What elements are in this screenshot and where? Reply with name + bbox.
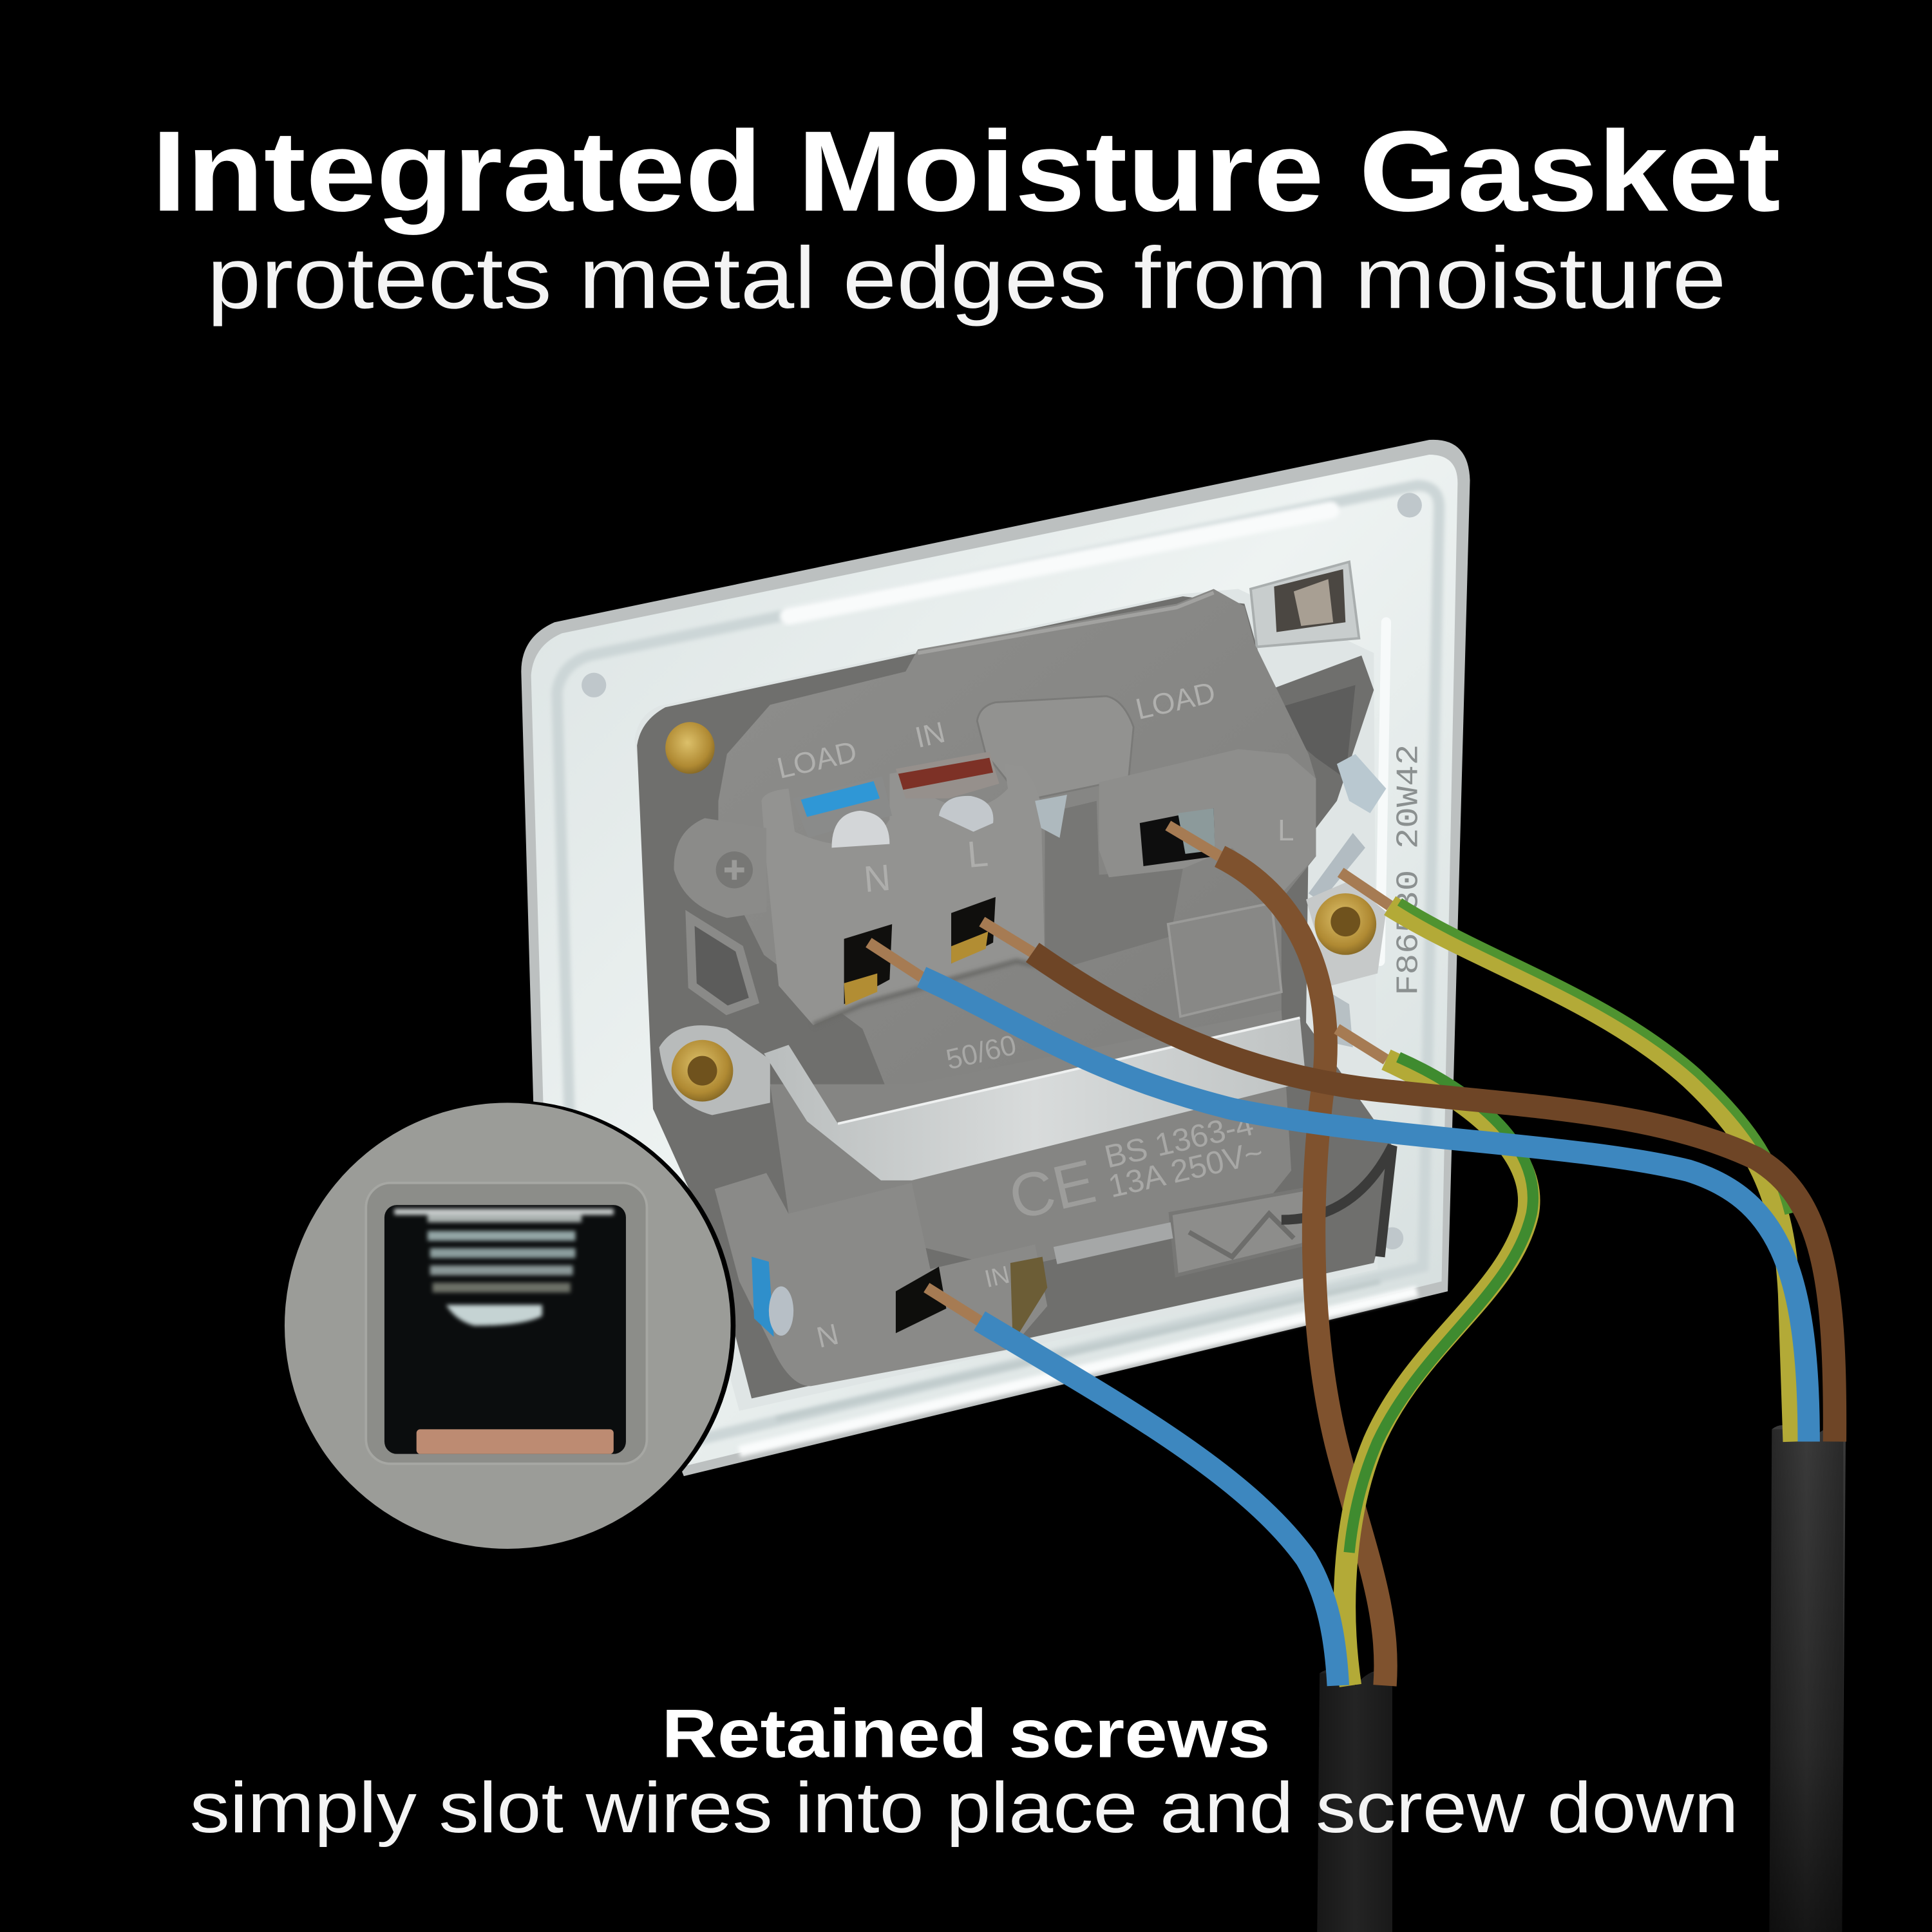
right cable sheath <box>1769 1425 1846 1932</box>
side screw <box>769 1286 793 1336</box>
brass fixing screw <box>665 722 715 774</box>
wires <box>869 826 1835 1685</box>
blanking tab <box>977 696 1133 801</box>
metal backplate <box>634 589 1378 1411</box>
rating markings <box>943 1029 1267 1233</box>
neutral wire hole <box>844 924 892 1005</box>
caption text: simply slot wires into place and screw down <box>190 1768 1739 1848</box>
N mark: N <box>813 1317 842 1354</box>
moulded labels: LOAD <box>774 734 860 785</box>
lower back frame edge <box>1282 1146 1392 1257</box>
side fixing ear with screw <box>674 818 766 918</box>
subtitle: protects metal edges from moisture <box>207 229 1726 327</box>
screw thread <box>394 1209 614 1326</box>
rating markings: CE <box>1003 1146 1102 1233</box>
brown wire to lower cable <box>1168 826 1386 1685</box>
black ring <box>285 1101 735 1551</box>
grey lens <box>285 1103 731 1549</box>
terminal screws <box>831 795 1067 848</box>
right hand earth lug and screws <box>1306 754 1386 1047</box>
load block <box>761 752 1067 1025</box>
moulded labels <box>774 675 1218 785</box>
earth wire lower <box>1337 1029 1533 1685</box>
live label <box>896 752 999 799</box>
lower right retaining clip <box>1054 1189 1306 1275</box>
neutral label <box>792 776 892 838</box>
earth clamp terminal opening <box>1251 562 1359 647</box>
bottom cable sheath <box>1317 1669 1392 1932</box>
moulded labels: LOAD <box>1132 675 1218 726</box>
N and L marks: L <box>965 833 990 876</box>
earth wire upper <box>1341 873 1794 1442</box>
blue wire to right cable <box>869 943 1809 1442</box>
live wire hole <box>951 897 996 963</box>
magnified detail: retained screw <box>285 1101 735 1551</box>
block shadow edge <box>813 961 1045 1025</box>
left earth lug with brass insert <box>659 1025 770 1115</box>
terminal recess <box>366 1183 647 1464</box>
live load terminal <box>1099 749 1316 893</box>
neutral blue tag <box>752 1257 774 1337</box>
rating markings: 50/60 <box>943 1029 1019 1075</box>
terminal opening <box>384 1205 626 1454</box>
lower load block <box>715 1173 1047 1386</box>
rating panel outline <box>1168 903 1282 1016</box>
upper body cover <box>718 589 1316 1090</box>
side clip <box>690 918 754 1010</box>
copper conductor <box>417 1429 614 1454</box>
IN mark: IN <box>982 1261 1012 1293</box>
blue wire to lower cable <box>927 1287 1338 1685</box>
live load terminal: L <box>1278 813 1294 847</box>
side moulding text: F86530 20W42 <box>1392 744 1426 996</box>
brown wire to right cable <box>982 922 1835 1442</box>
caption heading: Retained screws <box>661 1694 1271 1772</box>
metal strap <box>764 1018 1306 1180</box>
lower wire hole <box>896 1267 946 1333</box>
grey back frame <box>637 596 1392 1399</box>
switched socket rear assembly <box>521 440 1470 1476</box>
rating markings: BS 1363-4 <box>1101 1106 1257 1175</box>
title: Integrated Moisture Gasket <box>151 107 1781 235</box>
moulded labels: IN <box>912 715 948 754</box>
N and L marks <box>862 833 990 900</box>
faceplate with moisture gasket <box>521 440 1470 1476</box>
N and L marks: N <box>862 857 893 900</box>
rear central block <box>770 1010 1291 1269</box>
rating markings: 13A 250V~ <box>1105 1134 1267 1204</box>
